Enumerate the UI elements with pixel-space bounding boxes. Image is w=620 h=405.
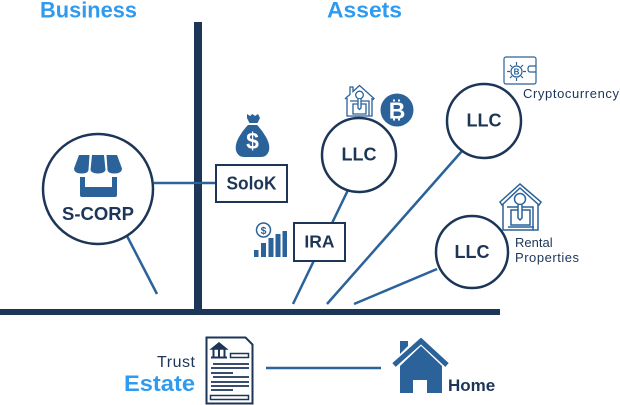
connector: crypto LLC to base: [327, 151, 462, 304]
vertical divider: [194, 22, 202, 312]
SoloK box: [216, 165, 287, 202]
connector: trust to home: [266, 367, 381, 369]
horizontal divider: [0, 309, 500, 315]
icon: rental house with key: [500, 184, 541, 230]
connector: rental LLC to base: [354, 269, 437, 304]
LLC node 3: LLC: [454, 242, 490, 262]
LLC node 2: LLC: [466, 110, 502, 130]
connector: S-CORP to SoloK over divider: [194, 182, 202, 184]
label: Trust: Trust: [157, 354, 196, 371]
connector: LLC to base through IRA: [293, 190, 348, 304]
icon: bitcoin coin: [380, 94, 414, 126]
icon: home: [394, 341, 447, 393]
label: Rental Properties: Rental: [515, 235, 553, 250]
IRA box: [294, 223, 345, 261]
icon: trust document: [206, 338, 252, 404]
icon: storefront: [74, 155, 122, 197]
connector: S-CORP to SoloK: [154, 182, 217, 184]
icon: growth chart with dollar coin: $: [261, 225, 267, 237]
SoloK box: SoloK: [226, 174, 276, 194]
S-CORP node: [43, 134, 153, 244]
icon: money bag: $: [246, 128, 259, 154]
icon: money bag: [236, 114, 269, 157]
icon: crypto wallet: [504, 57, 536, 84]
LLC node 2: [447, 84, 521, 158]
LLC node 3: [436, 216, 508, 288]
icon: growth chart with dollar coin: [254, 223, 287, 257]
S-CORP label: S-CORP: [62, 204, 134, 224]
IRA box: IRA: [304, 232, 335, 252]
label: Estate: Estate: [124, 371, 195, 396]
connector: S-CORP to base: [127, 236, 157, 294]
label: Rental Properties: [515, 235, 580, 265]
icon: house with key, crypto LLC: [345, 86, 374, 116]
icon: crypto wallet: B: [514, 68, 520, 76]
LLC node 1: [322, 118, 396, 192]
icon: bitcoin coin: B: [389, 98, 405, 124]
LLC node 1: LLC: [342, 144, 376, 164]
label: Home: Home: [448, 376, 495, 395]
label: Cryptocurrency: Cryptocurrency: [523, 86, 620, 101]
label: Rental Properties: Properties: [515, 250, 580, 265]
